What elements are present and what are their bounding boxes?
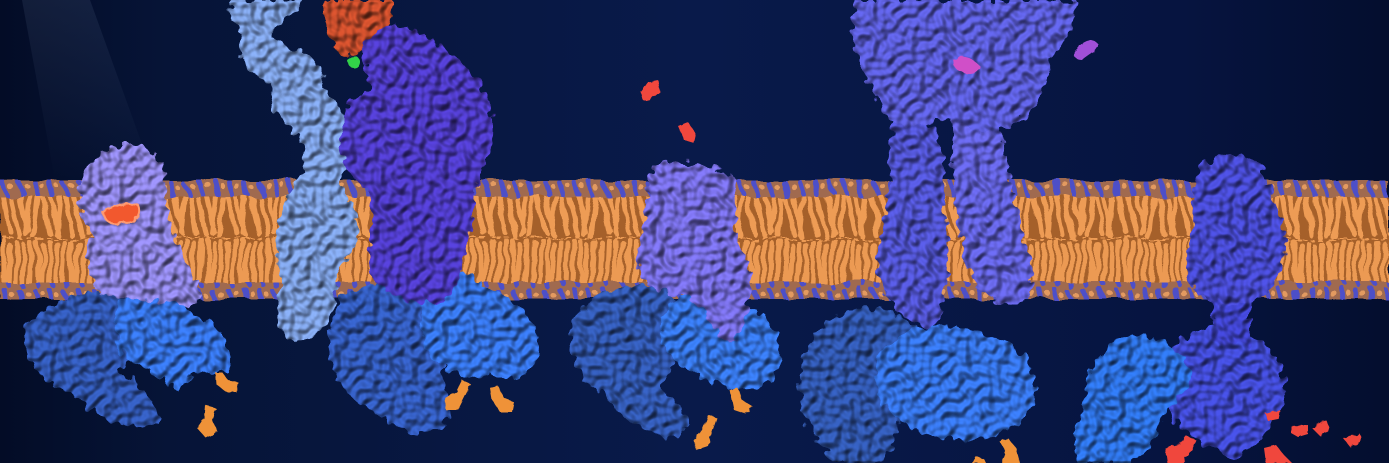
receptor 1 xyxy=(24,145,230,426)
cell membrane lipid bilayer xyxy=(0,180,1389,299)
receptor 1: dark blue domain xyxy=(24,292,158,426)
receptor 5 xyxy=(1075,155,1285,463)
receptor 3: dark blue domain xyxy=(570,285,686,437)
receptor 4 xyxy=(800,0,1098,463)
receptor 4: dark blue domain xyxy=(800,307,918,463)
light beam xyxy=(22,0,155,180)
receptor 1: transmembrane domain xyxy=(79,145,200,305)
receptor 3: transmembrane domain xyxy=(636,162,751,342)
receptor 2: dark blue domain xyxy=(328,283,450,432)
receptor 3: bright blue domain xyxy=(661,293,781,390)
receptor 4: bright blue domain xyxy=(876,325,1036,440)
receptor 5: bright blue domain xyxy=(1075,335,1191,463)
receptor 2: purple receptor body xyxy=(340,25,493,303)
molecules: orange cluster near receptors xyxy=(197,372,1020,463)
receptor 4: left transmembrane leg xyxy=(877,114,948,328)
ligand: pink molecule xyxy=(953,56,980,74)
ligand: violet molecule xyxy=(1074,40,1098,60)
receptor 2: bright blue domain xyxy=(420,271,540,380)
receptor 5: neck xyxy=(1212,290,1250,345)
receptor 4: extracellular domain xyxy=(852,0,1077,132)
receptor 2 xyxy=(231,0,540,432)
receptor 1: bright blue domain xyxy=(115,291,230,390)
receptor 5: purple-blue kinase domain xyxy=(1164,327,1285,457)
ligand: orange-red molecule in pocket xyxy=(103,204,139,224)
receptor 5: transmembrane domain xyxy=(1187,155,1285,305)
molecules: red cluster xyxy=(641,80,1361,463)
receptor 2: green contact point xyxy=(348,56,360,68)
receptor 2: light blue strand xyxy=(231,0,358,343)
receptor 2: red-orange extracellular protein xyxy=(323,0,393,55)
receptor 4: right transmembrane leg xyxy=(952,113,1032,305)
receptor 3 xyxy=(570,162,781,437)
